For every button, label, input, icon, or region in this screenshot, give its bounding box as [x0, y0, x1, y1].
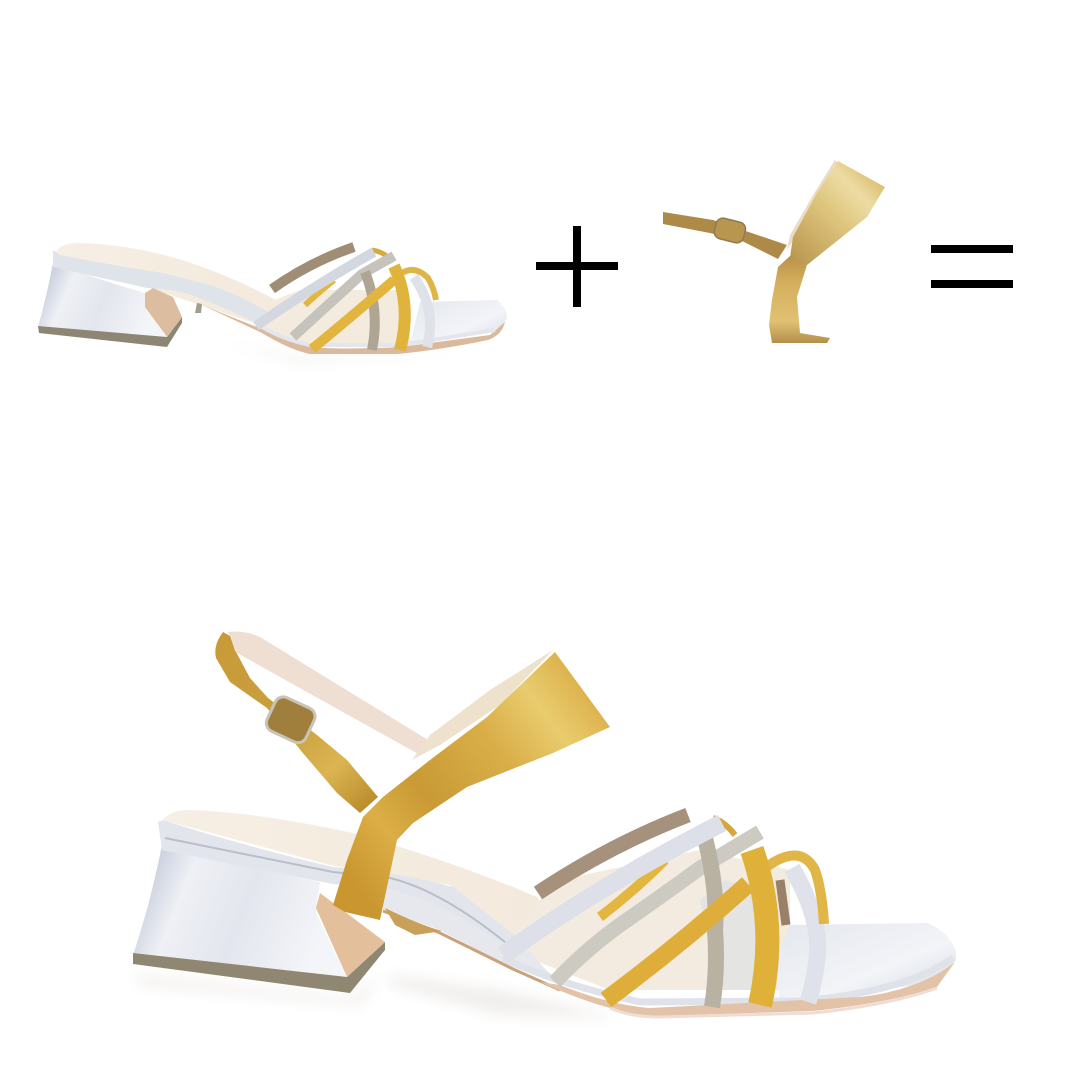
inner back strap: [228, 632, 433, 755]
top left: slide sandal without strap: [38, 243, 507, 363]
patterned vertical strap: [365, 272, 375, 350]
sole edge: [200, 304, 505, 354]
wide gold ankle band: [333, 652, 610, 920]
gold top strap: [372, 250, 393, 262]
gold small inner strap: [600, 860, 665, 917]
wide ankle band: [790, 161, 885, 265]
silver rim: [503, 958, 953, 1002]
block heel: [133, 845, 347, 978]
cracked strap: [272, 247, 354, 289]
patterned strap: [293, 256, 394, 337]
silver toe strap: [414, 277, 430, 347]
back pin: [195, 303, 202, 313]
heel sole: [38, 317, 182, 347]
footbed: [163, 810, 560, 940]
under-arch buckle detail: [385, 908, 442, 935]
vertical strap: [769, 256, 830, 343]
silver strap: [503, 823, 722, 955]
gold vertical strap: [394, 266, 405, 350]
buckle strap: [663, 212, 787, 259]
gold crossing strap: [312, 280, 394, 349]
equals sign: [931, 245, 1013, 288]
gold top strap: [713, 818, 735, 835]
gold arch: [765, 855, 824, 924]
small gold inner strap: [305, 280, 334, 305]
band edge: [787, 160, 840, 250]
interior under straps: [260, 290, 412, 345]
collar shade line: [165, 838, 505, 942]
heel inner cut: [145, 288, 182, 337]
silver strap: [256, 252, 374, 326]
heel collar: [158, 820, 517, 947]
gold vertical strap: [752, 850, 767, 1005]
block heel: [38, 263, 167, 338]
sole edge: [540, 962, 955, 1016]
gold crossing strap: [606, 884, 748, 1000]
buckle: [263, 694, 318, 746]
sole under-edge: [610, 988, 937, 1017]
patterned vertical strap: [705, 838, 716, 1007]
arch sole line: [383, 911, 560, 990]
heel sole: [133, 942, 385, 993]
patterned diagonal strap: [555, 832, 760, 982]
interior under straps: [515, 850, 790, 990]
cracked inner strip: [780, 880, 786, 925]
toe platform: [410, 300, 507, 345]
top centre: detachable gold strap: [663, 160, 885, 343]
bottom: assembled sandal: [133, 632, 956, 1018]
toe platform: [775, 923, 956, 1000]
back strap gold: [215, 632, 378, 813]
plus sign: [536, 226, 618, 307]
shoe shadow: [220, 342, 480, 363]
gold arch: [402, 270, 436, 300]
ground shadow: [390, 975, 620, 1018]
footbed: [56, 243, 300, 330]
welt: [262, 327, 495, 345]
silver toe strap: [792, 868, 818, 1002]
inner silver shadow: [700, 880, 770, 990]
buckle: [713, 217, 747, 244]
heel collar: [53, 250, 270, 323]
cracked strap: [538, 815, 688, 893]
heel inner cut: [316, 893, 385, 977]
silver arch wall: [383, 888, 560, 985]
band behind edge: [412, 650, 553, 760]
